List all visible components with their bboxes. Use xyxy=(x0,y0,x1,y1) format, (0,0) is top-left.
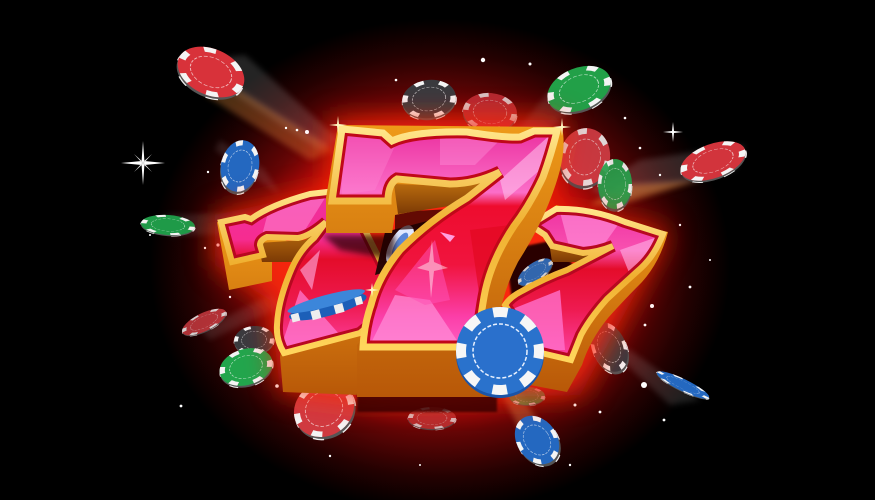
seven: left xyxy=(217,188,380,395)
gap behind centre seven arm xyxy=(375,215,450,275)
chip: white-blue behind centre seven xyxy=(380,221,420,269)
chip: large blue front xyxy=(456,307,544,398)
dark gap between centre and right sevens xyxy=(505,240,575,300)
centre seven extrusion xyxy=(326,125,564,397)
light streaks xyxy=(165,55,745,450)
chip: red bottom xyxy=(284,370,366,450)
chip: blue flat front xyxy=(286,285,369,326)
left seven inner shade xyxy=(258,222,330,262)
chip: dark lower right xyxy=(583,316,636,380)
illustration: triple seven with flying casino chips xyxy=(121,26,747,500)
centre seven inner shade xyxy=(394,176,498,214)
seven: right xyxy=(505,205,668,392)
sparkle: star left xyxy=(121,141,165,185)
chip: blue behind right gap xyxy=(513,253,557,292)
chip: blue bottom xyxy=(506,407,570,475)
chip: faded red top xyxy=(461,91,519,135)
chip: dark left xyxy=(233,324,275,357)
chip: green bottom xyxy=(509,387,545,406)
sparkle: star right xyxy=(663,122,683,142)
chip: blue far lower right xyxy=(654,367,712,404)
sparkles xyxy=(149,58,711,466)
red glow xyxy=(145,15,735,500)
chip: green right xyxy=(598,159,632,212)
chip: small red left xyxy=(178,303,230,341)
chip: red top left xyxy=(169,37,252,110)
glints xyxy=(329,116,571,297)
chip: red far right xyxy=(675,133,751,190)
chip: green far left xyxy=(140,213,196,238)
chip: red bottom centre xyxy=(408,407,456,430)
gem sparkle xyxy=(417,240,448,298)
chip: red right xyxy=(555,124,615,193)
centre seven drop shadow xyxy=(322,235,395,260)
chip: green lower left xyxy=(215,342,277,394)
centre seven gem face xyxy=(332,129,557,347)
right seven inner shade xyxy=(548,235,617,262)
chip: blue left xyxy=(215,137,264,198)
centre seven gold frame xyxy=(332,129,557,347)
chip: dark top xyxy=(400,76,459,124)
chip: green top right xyxy=(541,57,618,123)
seven glow xyxy=(215,120,670,400)
seven: centre xyxy=(322,125,564,412)
left seven extrusion xyxy=(217,222,360,395)
right seven extrusion xyxy=(505,205,668,392)
